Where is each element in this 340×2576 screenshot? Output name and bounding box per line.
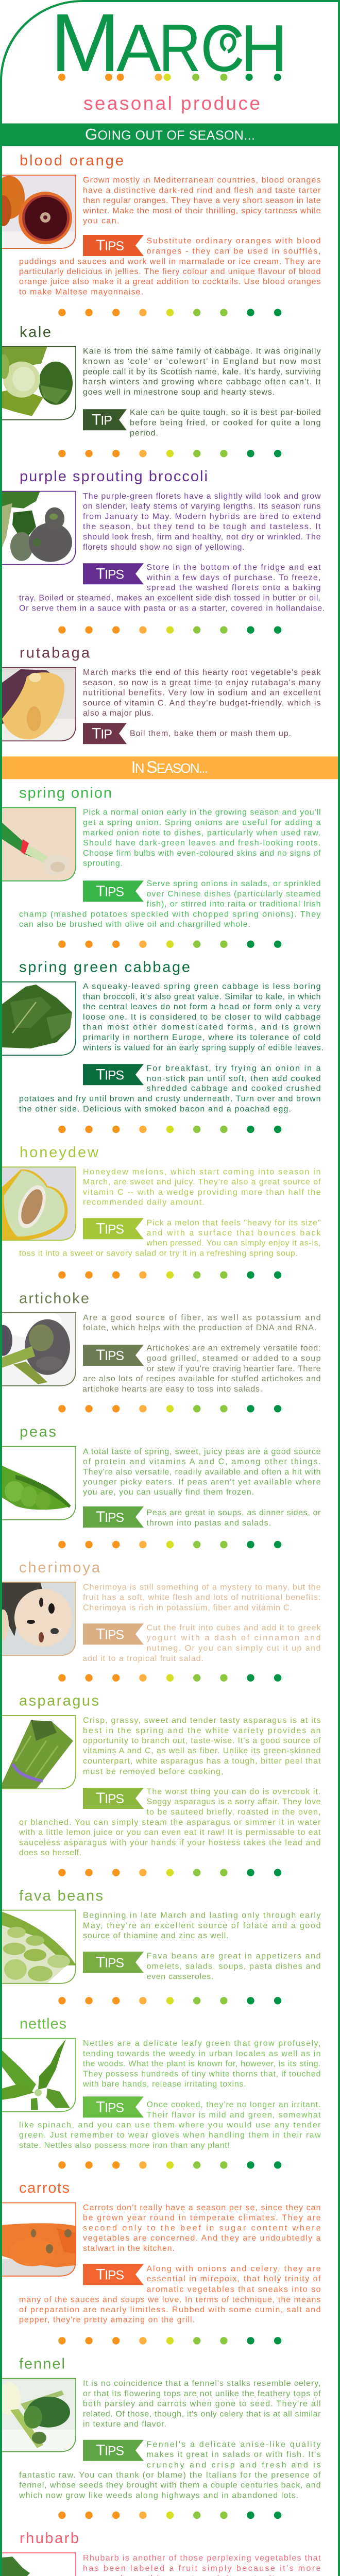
heading: asparagus: asparagus [19,1693,99,1709]
tips text: fennel: Fennel's a delicate anise-like quality [146,2440,320,2449]
body text: fennel: or that its flowering tops are not unlike the feathery tops of [83,2389,321,2398]
heading: blood orange: blood orange [20,152,124,169]
tips text: honeydew: when pressed. You can simply enjoy it as-is, [146,1239,320,1248]
section: asparagus [2,1693,321,1857]
section: kale [0,324,321,437]
section bar: in season [2,756,338,779]
section: fava beans [2,1888,321,1984]
title: H [241,11,287,86]
tips text: fennel [19,2440,321,2500]
heading: artichoke: artichoke [19,1290,89,1307]
tips text: fava beans: Fava beans are great in appetizers and [146,1952,320,1961]
heading: kale: kale [20,324,51,341]
divider dots [58,626,281,634]
photo: honeydew [2,1166,76,1241]
divider dots [58,1405,281,1413]
photo: rhubarb [0,2552,76,2576]
tips text: honeydew: Pick a melon that feels "heavy for its size" [146,1218,320,1227]
body text: carrots: second only to the beef in sugar content where [83,2224,321,2232]
photo: fennel [0,2378,76,2452]
body text: peas: A total taste of spring, sweet, juicy peas are a good source [83,1447,321,1456]
title: C [200,11,245,86]
tip text: rutabaga: Boil them, bake them or mash them up. [130,729,291,738]
section: fennel [0,2355,321,2500]
body text: blood orange: Grown mostly in Mediterranean countries, blood oranges [83,176,320,184]
tips banner: spring green cabbage [83,1064,144,1085]
body text: peas: of protein and vitamins A and C, among other things. [83,1458,320,1466]
body text: blood orange [82,176,321,226]
body text: honeydew: March, are sweet and juicy. They're also a great source of [83,1178,321,1187]
photo: carrots [2,2202,76,2277]
body text: purple sprouting broccoli [83,492,321,552]
body text: asparagus: counterpart, white asparagus has a tough, bitter peel that [83,1757,321,1766]
heading: honeydew: honeydew [20,1144,99,1161]
heading: fennel: fennel [19,2355,65,2372]
body text: fennel [83,2379,321,2429]
photo: nettles [2,2038,76,2112]
body text: fennel: both parsley and carrots when gone to seed. They're all [83,2400,320,2409]
tips text: purple sprouting broccoli: spread the washed florets onto a baking [146,584,320,592]
tip text: kale: Kale can be quite tough, so it is best par-boiled [130,409,320,417]
body text: blood orange: you can. [83,217,120,226]
body text: kale: Kale is from the same family of cabbage. It was originally [83,347,320,356]
tip text: kale: before being fried, or cooked for quite a long [130,418,320,428]
divider dots [58,2161,281,2169]
body text: fava beans: source of thiamine and zinc as well. [83,1931,229,1940]
tips text: spring green cabbage: shredded cabbage and cooked crushed [146,1084,320,1093]
divider dots [58,1126,281,1133]
tips text: spring onion: fish), or stirred into raita or traditional Irish [146,900,320,909]
tips text: artichoke: are also lots of recipes available for stuffed artichokes and [83,1375,320,1383]
tips text: carrots [19,2264,321,2325]
body text: peas: you are, you can usually find them frozen. [83,1488,254,1497]
tips banner: blood orange: TIPS [96,237,124,254]
tip text: kale: period. [130,429,158,437]
divider dots [58,1674,281,1682]
body text: carrots [83,2204,321,2253]
body text: spring onion: Choose firm bulbs with even-coloured skins and no signs of [83,849,321,858]
body text: spring green cabbage: than most other domesticated forms, and is grown [83,1023,320,1032]
tips text: purple sprouting broccoli: Or serve them in a sauce with pasta or as a starter, covered in hollandaise. [19,604,325,613]
tips text: asparagus [19,1787,321,1857]
section: honeydew [2,1144,321,1258]
tips banner: nettles [83,2096,144,2117]
tips text: artichoke: good grilled, steamed or added to a soup [146,1354,321,1363]
tips text: nettles [19,2100,321,2150]
tips banner: honeydew: TIPS [96,1220,124,1237]
tips banner: spring green cabbage: TIPS [96,1066,124,1083]
tips text: nettles: Their flavor is mild and green, somewhat [146,2111,321,2120]
tips text: cherimoya: Cut the fruit into cubes and add it to greek [146,1623,321,1632]
tips text: spring green cabbage: the other side. Delicious with smoked bacon and a poached egg. [19,1105,291,1113]
body text: nettles: Nettles are a delicate leafy green that grow profusely, [83,2039,320,2048]
tips text: purple sprouting broccoli: Store in the bottom of the fridge and eat [146,563,321,572]
photo: purple sprouting broccoli [2,491,76,565]
tips text: cherimoya: add it to a tropical fruit salad. [82,1654,203,1663]
photo: kale [0,346,76,420]
tips text: blood orange: Substitute ordinary oranges with blood [146,237,320,246]
body text: fava beans [83,1911,321,1940]
body text: spring green cabbage: loose one. It is considered to be closer to wild cabbage [83,1013,321,1022]
body text: spring green cabbage: A squeaky-leaved spring green cabbage is less boring [83,982,320,991]
body text: fennel: in texture and flavor. [83,2420,166,2429]
photo: cherimoya [0,1582,76,1656]
body text: spring green cabbage: than broccoli, it's also great value. Similar to kale, in which [83,992,320,1001]
tips banner: artichoke [83,1345,144,1366]
photo: rutabaga [2,667,76,741]
tips text: purple sprouting broccoli: tray. Boiled or steamed, makes an excellent side dish tossed in butter or oil. [19,594,320,603]
subtitle: seasonal produce [83,93,260,114]
photo: peas [2,1446,76,1520]
section: nettles [2,2016,321,2150]
tips text: purple sprouting broccoli: within a few days of purchase. To freeze, [146,573,320,582]
tips text: spring onion: champ (mashed potatoes speckled with chopped spring onions). They [19,910,320,919]
body text: rutabaga: March marks the end of this hearty root vegetable's peak [83,668,321,677]
title: A [116,10,162,86]
body text: purple sprouting broccoli: should look fresh, firm and healthy, not dry or wrinkled. The [83,533,321,541]
body text: carrots: vegetables are concerned. And they are undoubtedly a [83,2234,321,2243]
heading: cherimoya: cherimoya [19,1560,100,1576]
body text: fava beans: May, they're an excellent source of folate and a good [83,1922,320,1930]
tips text: spring green cabbage: For breakfast, try frying an onion in a [146,1064,321,1073]
tips text: spring green cabbage: potatoes and fry until brown and crusty underneath. Turn over and brown [19,1094,320,1103]
body text: artichoke [83,1313,321,1332]
tips banner: asparagus [83,1788,144,1809]
tips text: asparagus: Soggy asparagus is a sorry affair. They love [146,1798,321,1806]
tips banner: carrots [83,2264,144,2285]
tip banner: rutabaga: TIP [92,725,112,742]
title: R [159,10,201,86]
tips text: peas: Peas are great in soups, as dinner sides, or [146,1509,321,1517]
tips text: artichoke: artichoke hearts are easy to toss into salads. [82,1385,262,1394]
body text: rutabaga: nutritional benefits. Very low in sodium and an excellent [83,689,321,698]
tip text: kale [130,409,320,437]
section bar: going out of season: GOING OUT OF SEASON... [85,125,255,143]
photo: artichoke [0,1307,76,1386]
section: artichoke [0,1290,321,1394]
section: purple sprouting broccoli [2,468,325,613]
tips text: spring onion: Serve spring onions in salads, or sprinkled [146,879,320,888]
tips text: nettles: like spinach, and you can use them where you would use any tender [19,2121,321,2129]
title [50,0,287,89]
body text: kale [83,347,321,397]
section: cherimoya [0,1560,321,1663]
body text: rhubarb: has been labeled a fruit simply because it's more [83,2564,321,2573]
tip banner: rutabaga [83,723,127,744]
divider dots [58,2512,281,2519]
body text: purple sprouting broccoli: The purple-green florets have a slightly wild look and grow [83,492,321,501]
tips text: purple sprouting broccoli [19,563,325,613]
divider dots [58,309,281,316]
body text: asparagus: best in the spring and the white variety provides an [83,1726,320,1735]
body text: spring onion: Should have dark-green leaves and fresh-looking roots. [83,839,320,848]
body text: asparagus: vitamins A and C, as well as fiber. Unlike its green-skinned [83,1747,320,1755]
tips text: fennel: fantastic raw. You can thank (or blame) the Italians for the presence of [19,2471,321,2480]
tips text: fennel: crunchy and crisp and fresh and is [146,2461,320,2469]
section bar: going out of season [2,124,338,146]
tips banner: honeydew [83,1218,144,1239]
body text: peas: younger picky eaters. If peas aren't yet available where [83,1478,321,1487]
body text: purple sprouting broccoli: florets should show no sign of yellowing. [83,543,245,552]
tips banner: asparagus: TIPS [96,1790,124,1807]
tip banner: kale: TIP [92,411,112,428]
tips banner: spring onion: TIPS [96,883,124,900]
divider dots [58,941,281,948]
tips text: carrots: aromatic vegetables that sneaks into so [146,2285,321,2294]
body text: honeydew [83,1167,321,1207]
body text: asparagus [83,1716,321,1776]
photo: fava beans [2,1910,76,1984]
section: rutabaga [2,645,321,744]
body text: blood orange: have a distinctive dark-red rind and flesh and taste tarter [83,186,321,195]
tip banner: kale [83,409,127,430]
tips text: fennel: which now grow like weeds along highways and in abandoned lots. [19,2491,299,2500]
heading: spring green cabbage: spring green cabbage [19,959,190,976]
body text: nettles [82,2039,320,2089]
body text: rhubarb: Rhubarb is another of those perplexing vegetables that [83,2554,321,2563]
tips text: blood orange: oranges - they can be used in soufflés, [146,247,320,256]
body text: peas: They're also versatile, readily available and often a hit with [83,1468,320,1477]
tips text: fennel: makes it great in salads or with fish. It's [146,2450,320,2459]
tips text: carrots: essential in mirepoix, that holy trinity of [146,2275,321,2283]
body text: carrots: Carrots don't really have a season per se, since they can [83,2204,320,2212]
body text: fennel: related. Of those, though, it's only celery that is at all similar [83,2410,321,2418]
photo: spring green cabbage [2,981,76,1056]
body text: rhubarb [83,2554,321,2576]
tips text: nettles: Once cooked, they're no longer an irritant. [146,2100,320,2109]
tips text: artichoke [82,1344,321,1394]
body text: spring onion [83,808,321,868]
body text: asparagus: Crisp, grassy, sweet and tender tasty asparagus is at its [83,1716,320,1725]
tips text: nettles: green. Just remember to wear gloves when handling them in their raw [19,2131,321,2140]
section: spring green cabbage [2,959,324,1113]
tips text: fava beans: even casseroles. [146,1972,213,1981]
body text: spring green cabbage: primarily in northern Europe, where its tolerance of cold [83,1033,320,1042]
heading: rutabaga: rutabaga [20,645,90,662]
body text: purple sprouting broccoli: on slender, leafy stems of varying lengths. Its season runs [83,502,320,511]
heading: peas: peas [20,1423,56,1440]
tips text: asparagus: The worst thing you can do is overcook it. [146,1787,320,1796]
tips text: carrots: many of the sauces and soups we love. In terms of technique, the means [19,2295,321,2304]
body text: blood orange: winter. Make the most of their thrilling, spicy tartness while [82,207,321,215]
section: blood orange [0,152,321,297]
section: spring onion [2,785,321,929]
tips text: spring onion: over Chinese dishes (particularly steamed [146,890,320,899]
body text: spring onion: marked onion note to dishes, particularly when used raw. [83,828,320,837]
tips text: asparagus: with a little lemon juice or you can even eat it raw! It is permissable to eat [19,1828,321,1837]
body text: honeydew: recommended daily amount. [83,1198,205,1207]
tips banner: cherimoya [83,1623,144,1645]
tips text: fennel: fennel, whose seeds they brought with them a couple centuries back, and [19,2481,320,2489]
tips text: carrots: of preparation are nearly limitless. Rubbed with some cumin, salt and [19,2306,320,2314]
body text: spring green cabbage [82,982,324,1052]
tips text: honeydew: toss it into a sweet or savory salad or try it in a refreshing spring soup. [19,1249,298,1258]
body text: peas [83,1447,321,1497]
tips banner: fava beans: TIPS [96,1954,124,1971]
body text: spring green cabbage: the central leaves do not form a head or form only a very [83,1003,320,1011]
tips text: blood orange: particularly delicious in jellies. The fiery colour and unique flavour of blood [19,267,320,276]
tips text: asparagus: or blanched. You can simply steam the asparagus or simmer it in water [19,1818,321,1827]
tips text: peas: thrown into pastas and salads. [146,1519,271,1528]
body text: purple sprouting broccoli: from January to May. Modern hybrids are bred to extend [83,512,320,521]
tips text: spring onion [19,879,320,929]
section: peas [2,1423,321,1528]
title spiral detail [222,35,234,52]
tips text: cherimoya: yogurt with a dash of cinnamon and [146,1634,320,1642]
body text: rutabaga [83,668,321,718]
tips text: carrots: Along with onions and celery, they are [146,2264,321,2273]
tips banner: fava beans [83,1952,144,1973]
tips text: asparagus: to be sauteed briefly, roasted in the oven, [146,1808,320,1817]
body text: rutabaga: season, so now is a great time to enjoy rutabaga's many [83,679,320,687]
body text: cherimoya: Cherimoya is still something of a mystery to many, but the [83,1583,321,1592]
body text: honeydew: Honeydew melons, which start coming into season in [83,1167,320,1176]
divider dots [58,1541,281,1548]
tips text: honeydew [19,1218,321,1258]
divider dots [58,450,281,457]
tips text: asparagus: sauceless asparagus with your hands if your hostess takes the lead and [19,1838,320,1847]
body text: spring onion: sprouting. [83,859,123,868]
tips text: fava beans [146,1952,320,1981]
tips banner: nettles: TIPS [96,2098,124,2115]
tips text: peas [146,1509,321,1528]
tips banner: blood orange [83,235,144,256]
tips banner: purple sprouting broccoli: TIPS [96,565,124,582]
body text: kale: harsh winters and growing where cabbage often can't. It [83,378,321,386]
body text: honeydew: vitamin C -- with a wedge providing more than half the [83,1188,321,1197]
heading: purple sprouting broccoli: purple sprouting broccoli [20,468,208,485]
body text: asparagus: opportunity to branch out, taste-wise. It's a good source of [83,1736,321,1745]
tips text: nettles: state. Nettles also possess more iron than any plant! [19,2141,230,2150]
tips text: blood orange [19,237,321,297]
tips text: cherimoya: nutmeg. Or you can simply cut it up and [146,1644,320,1653]
tips text: blood orange: puddings and sauces and work well in marmalade or ice cream. They are [19,257,321,266]
heading: spring onion: spring onion [19,785,112,801]
divider dots [58,2337,281,2344]
body text: rutabaga: source of vitamin C. And they're budget-friendly, which is [83,699,320,707]
tips banner: carrots: TIPS [96,2266,124,2283]
tips banner: fennel [83,2440,144,2461]
tips text: spring onion: can also be brushed with olive oil and chargrilled whole. [19,920,250,929]
body text: fennel: It is no coincidence that a fennel's stalks resemble celery, [83,2379,321,2388]
body text: kale: known as 'cole' or 'colewort' in England but now most [83,358,321,366]
tips text: artichoke: Artichokes are an extremely versatile food: [146,1344,320,1353]
body text: carrots: be grown year round in temperate climates. They are [83,2214,321,2223]
body text: cherimoya: fruit has a soft, white flesh and lots of nutritional benefits: [83,1593,320,1602]
tips text: artichoke: or stew if you're craving heartier fare. There [146,1364,321,1373]
body text: asparagus: must be removed before cooking, [83,1767,224,1776]
body text: rutabaga: also a major plus. [83,709,154,718]
tips text: asparagus: does so herself. [19,1849,81,1857]
photo: spring onion [2,807,76,882]
section: rhubarb [0,2530,324,2576]
photo: asparagus [2,1715,76,1789]
tips banner: artichoke: TIPS [96,1347,124,1364]
body text: cherimoya: Cherimoya is rich in potassium, fiber and vitamin C. [83,1603,292,1612]
tips text: spring green cabbage: non-stick pan until soft, then add cooked [146,1074,320,1083]
tips banner: cherimoya: TIPS [96,1625,124,1642]
body text: spring onion: Pick a normal onion early in the growing season and you'll [83,808,320,817]
body text: artichoke: folate, which helps with the production of DNA and RNA. [83,1324,316,1332]
tips text: spring green cabbage [19,1064,321,1113]
body text: spring onion: get a spring onion. Spring onions are useful for adding a [83,818,321,827]
body text: kale: people call it by its Scottish name, kale. It's hardy, surviving [83,367,320,376]
section: carrots [2,2180,321,2325]
body text: nettles: They possess hundreds of tiny white thorns that, if touched [83,2070,320,2078]
body text: purple sprouting broccoli: the season, but they tend to be tough and tasteless. It [83,522,321,531]
body text: nettles: with bare hands, release irritating toxins. [82,2080,246,2089]
title dots [58,74,281,81]
section bar: in season: IN SEASON... [131,758,208,776]
tips text: cherimoya [82,1623,321,1663]
heading: nettles: nettles [20,2016,66,2032]
divider dots [58,1997,281,2004]
tips text: honeydew: and with a surface that bounces back [146,1229,321,1238]
tips text: fava beans: omelets, salads, soups, pasta dishes and [146,1962,320,1971]
tips text: blood orange: orange juice also make it a great addition to cocktails. Use blood oranges [19,278,320,286]
tips banner: spring onion [83,880,144,902]
heading: carrots: carrots [19,2180,70,2196]
heading: rhubarb: rhubarb [20,2530,79,2547]
tips banner: peas: TIPS [96,1509,124,1526]
tips text: blood orange: to make Maltese mayonnaise. [19,288,143,297]
body text: nettles: the woods. What the plant is known for, however, is its sting. [83,2060,320,2069]
body text: kale: goes well in minestrone soup and hearty stews. [83,388,275,397]
tips banner: purple sprouting broccoli [83,563,144,584]
heading: fava beans: fava beans [19,1888,103,1904]
body text: spring green cabbage: winters is valued for an early spring supply of edible leaves. [82,1044,324,1052]
tips banner: fennel: TIPS [96,2442,124,2459]
body text: fava beans: Beginning in late March and lasting only through early [83,1911,321,1920]
tips text: carrots: pepper, they're pretty amazing on the grill. [19,2316,195,2325]
divider dots [58,1272,281,1279]
body text: blood orange: than regular oranges. They have a very short season in late [83,196,321,205]
body text: carrots: stalwart in the kitchen. [83,2244,175,2253]
photo: blood orange [0,175,76,249]
body text: cherimoya [83,1583,321,1612]
body text: nettles: tending towards the weedy in urban locales as well as in [83,2049,320,2058]
divider dots [58,1869,281,1876]
tips banner: peas [83,1506,144,1528]
body text: artichoke: Are a good source of fiber, as well as potassium and [83,1313,321,1322]
